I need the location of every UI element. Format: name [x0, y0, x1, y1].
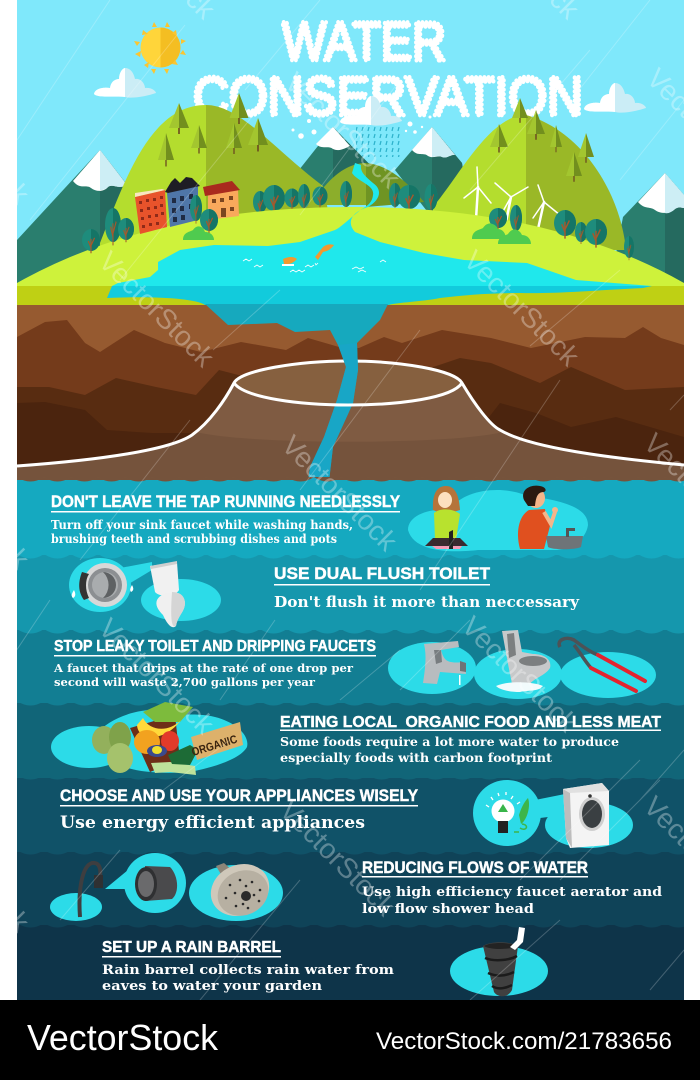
scallop edge — [17, 923, 684, 928]
band: rain barrel — [17, 923, 684, 1000]
title — [193, 10, 583, 127]
soil top layer — [17, 305, 684, 480]
scallop edge — [17, 629, 684, 634]
fish and ripples — [243, 244, 386, 272]
green hills — [100, 105, 626, 250]
scallop edge — [17, 701, 684, 706]
watermarks: VectorStock — [458, 244, 586, 373]
rain — [292, 116, 432, 157]
landscape scene — [17, 0, 684, 305]
icon: faucet toilet and pliers — [388, 630, 656, 699]
band: tap — [17, 477, 684, 555]
icon: people at sinks — [408, 486, 588, 551]
icon: dual flush toilet — [69, 558, 221, 627]
text: rain barrel: eaves to water your garden — [102, 979, 323, 994]
aquifer funnel — [17, 361, 684, 480]
round trees back — [253, 181, 438, 215]
text: food — [280, 734, 619, 765]
icon: organic food: ORGANIC — [190, 734, 239, 759]
footer logo: VectorStock — [27, 1017, 219, 1058]
text: tap: Turn off your sink faucet while washing hands, — [51, 518, 353, 532]
river and lake — [107, 163, 652, 305]
text: dual flush: Don't flush it more than neccessary — [274, 593, 580, 611]
watermarks: VectorStock — [93, 612, 221, 741]
text: food: especially foods with carbon footprint — [280, 750, 552, 765]
watermarks: VectorStock — [274, 794, 402, 923]
icon: rain barrel — [450, 927, 548, 996]
text: flows: Use high efficiency faucet aerator and — [362, 885, 662, 900]
heading: appliances: CHOOSE AND USE YOUR APPLIANCES WISELY — [60, 787, 418, 805]
scallop edge — [17, 775, 684, 780]
footer bar — [0, 1000, 700, 1080]
icon: bulb and washer — [473, 780, 633, 848]
soil layer 2 — [17, 320, 684, 480]
soil layer 3 — [17, 358, 684, 480]
band: appliances — [17, 775, 684, 852]
band: dual flush toilet — [17, 554, 684, 630]
title: WATER — [282, 10, 446, 72]
heading: leaks: STOP LEAKY TOILET AND DRIPPING FAUCETS — [54, 638, 376, 655]
text: leaks: second will waste 2,700 gallons per year — [54, 675, 316, 689]
heading: dual flush: USE DUAL FLUSH TOILET — [274, 564, 491, 583]
watermarks: VectorStock — [456, 610, 584, 739]
lower stream — [308, 343, 358, 482]
footer url: VectorStock.com/21783656 — [376, 1028, 672, 1055]
title: CONSERVATION — [193, 65, 583, 127]
heading: food: EATING LOCAL ORGANIC FOOD AND LESS MEAT — [280, 714, 661, 731]
text: flows — [362, 885, 662, 917]
village — [135, 177, 240, 234]
band: leaks — [17, 629, 684, 703]
underground water stream — [205, 304, 388, 480]
sky — [17, 0, 684, 300]
ground — [17, 207, 684, 305]
pine trees — [158, 93, 594, 182]
soil layer 4 — [17, 402, 684, 480]
text: rain barrel — [102, 963, 394, 994]
text: food: Some foods require a lot more water to produce — [280, 734, 619, 749]
text: flows: low flow shower head — [362, 902, 534, 917]
text: rain barrel: Rain barrel collects rain water from — [102, 963, 394, 978]
watermarks: VectorStock — [276, 429, 404, 558]
icon: organic food — [51, 702, 247, 775]
text: tap — [51, 518, 353, 546]
wind turbines — [464, 167, 560, 229]
text: tap: brushing teeth and scrubbing dishes and pots — [51, 532, 337, 546]
scallop edge — [17, 477, 684, 482]
text: leaks — [53, 661, 354, 689]
funnel front rim — [234, 383, 462, 405]
heading: flows: REDUCING FLOWS OF WATER — [362, 859, 588, 877]
scallop edge — [17, 850, 684, 855]
text: appliances: Use energy efficient appliances — [60, 813, 365, 832]
icon: aerator and shower head — [50, 853, 283, 925]
ground front edge — [17, 286, 684, 305]
heading: tap: DON'T LEAVE THE TAP RUNNING NEEDLESSLY — [51, 493, 400, 511]
underground soil cross-section — [17, 304, 684, 482]
round trees front — [82, 195, 634, 260]
scallop edge — [17, 554, 684, 559]
text: leaks: A faucet that drips at the rate of one drop per — [53, 661, 354, 675]
band: flows — [17, 850, 684, 925]
watermarks: VectorStock — [93, 245, 221, 374]
watermarks: VectorStock — [279, 66, 407, 195]
sun — [134, 22, 186, 74]
band: food — [17, 701, 684, 778]
bushes — [183, 223, 531, 244]
mountains — [17, 127, 684, 285]
heading: rain barrel: SET UP A RAIN BARREL — [102, 939, 281, 956]
clouds — [94, 68, 646, 126]
